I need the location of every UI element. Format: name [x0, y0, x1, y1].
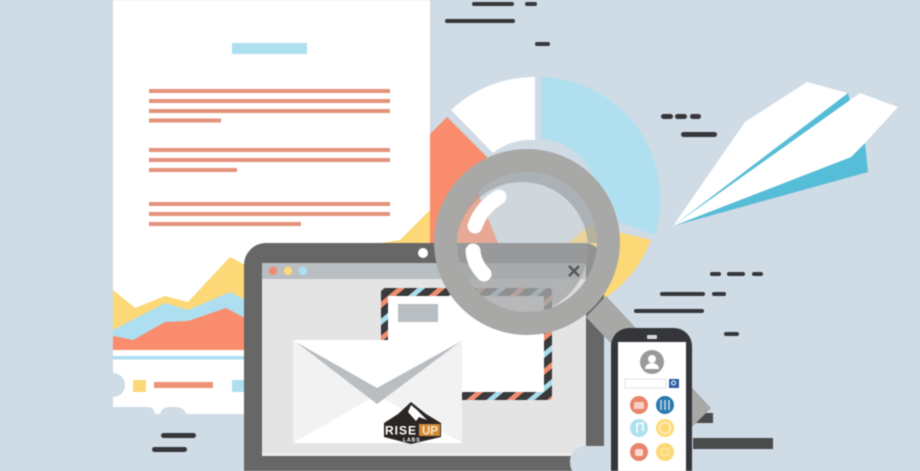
- search box: [625, 379, 679, 388]
- bottom left dashes: [152, 433, 196, 452]
- lens shadow: [458, 172, 598, 312]
- app icons: [630, 396, 674, 461]
- magnifier handle shadow: [693, 413, 773, 449]
- laptop: [244, 243, 604, 471]
- lens ring: [446, 160, 608, 324]
- avatar icon: [640, 350, 664, 374]
- magnifier handle: [586, 296, 711, 428]
- chart legend: [101, 373, 245, 397]
- document text lines: [149, 89, 390, 226]
- pie chart: [420, 77, 660, 298]
- document title bar: [232, 43, 307, 54]
- logo: LABS: [403, 438, 421, 444]
- close icon: [569, 266, 579, 276]
- logo: UP: [422, 426, 438, 438]
- chart baseline: [113, 356, 430, 360]
- area chart: [113, 210, 430, 350]
- phone: [611, 328, 692, 471]
- lens glass: [456, 171, 598, 313]
- window buttons: [269, 267, 307, 275]
- camera dot: [418, 248, 428, 258]
- phone screen: [618, 342, 686, 471]
- magnifying glass: [440, 160, 610, 324]
- right dashes: [634, 114, 763, 336]
- envelope: [293, 340, 462, 443]
- paper plane: [673, 82, 898, 226]
- airmail letter: [381, 288, 552, 400]
- document page: [101, 0, 430, 414]
- browser title bar: [262, 263, 586, 279]
- logo: RISE: [385, 424, 417, 438]
- logo: [384, 402, 441, 444]
- laptop screen: [262, 279, 586, 456]
- top dashes: [445, 2, 550, 46]
- lens highlights: [473, 197, 499, 274]
- phone speaker: [647, 335, 657, 339]
- background blob: [570, 446, 620, 471]
